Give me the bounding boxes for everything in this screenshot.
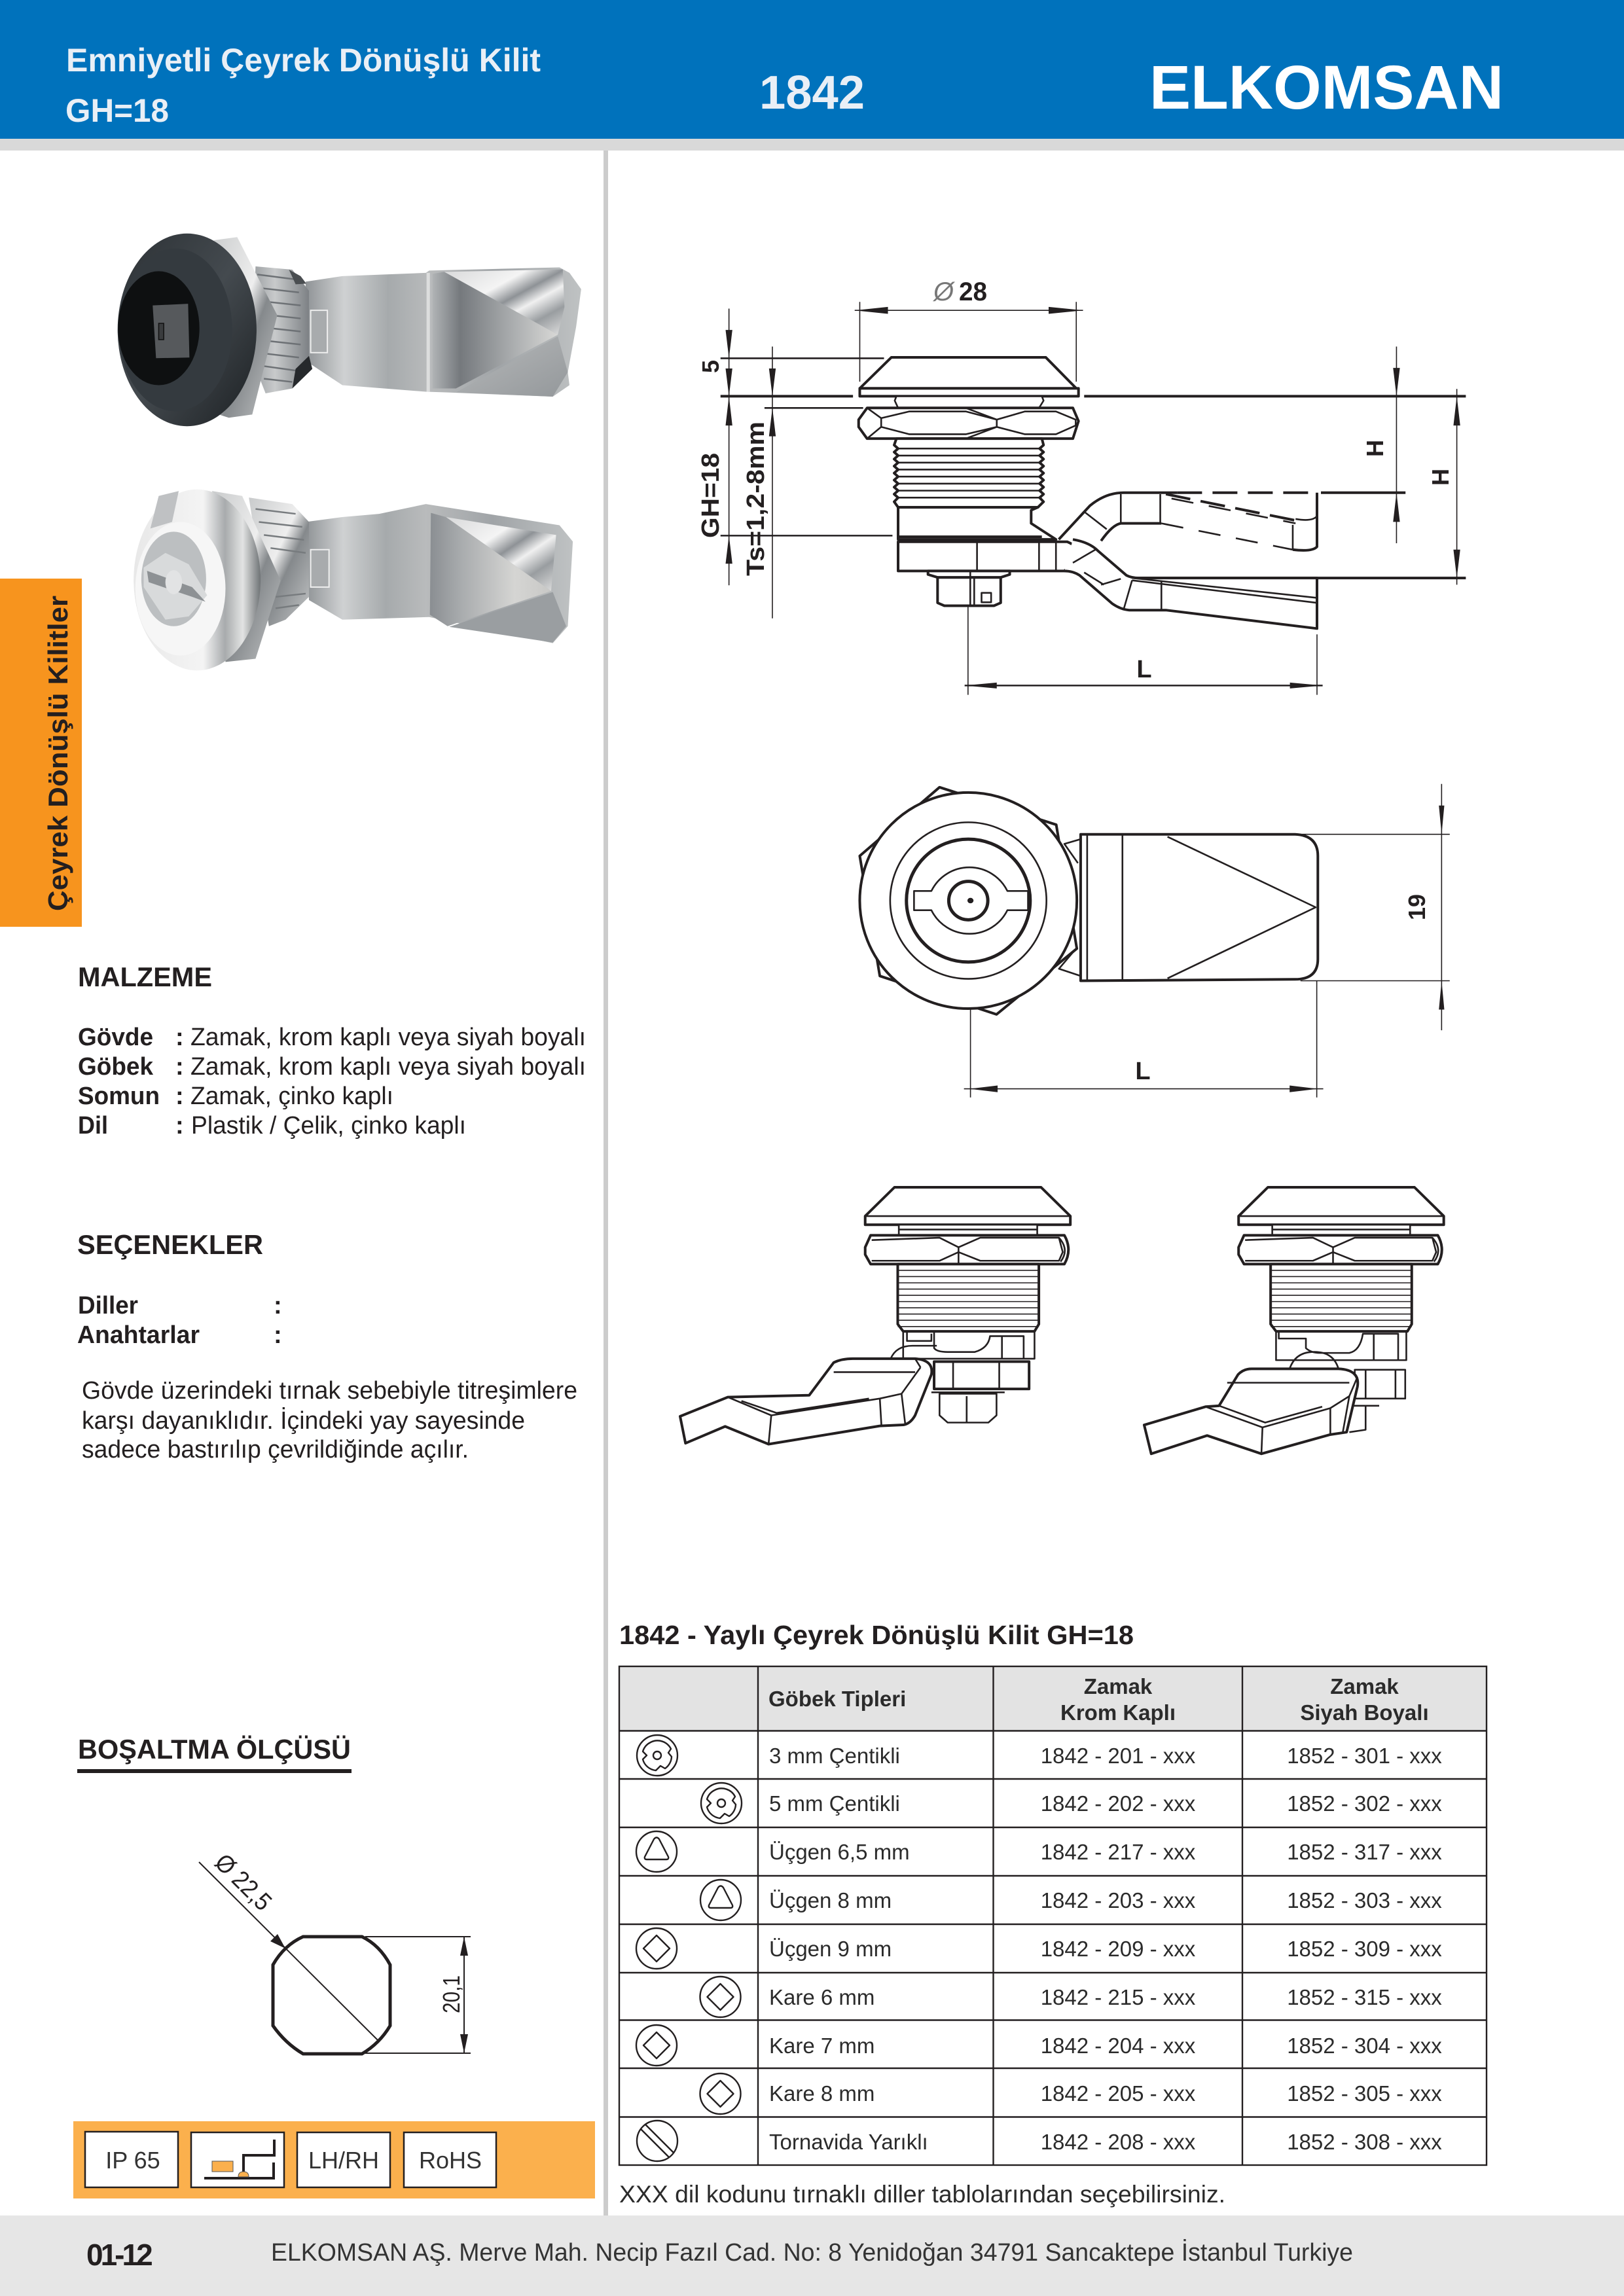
table header: Zamak [1330,1674,1399,1698]
table rows text: 1852 - 304 - xxx [1287,2034,1442,2058]
description text [82,1377,577,1463]
table grid [619,1666,1487,2165]
icon: diamond 8 mm [700,2073,741,2114]
side tab: category [0,579,82,927]
icon: diamond 6 mm [700,1977,741,2017]
table rows text [769,1744,1442,2154]
icon: diamond 7 mm [636,2025,677,2066]
table rows text: 3 mm Çentikli [769,1744,900,1768]
certification badge bar [73,2121,595,2198]
table rows text: 1852 - 305 - xxx [1287,2081,1442,2106]
table rows text: 1842 - 201 - xxx [1041,1744,1196,1768]
table rows text: 1852 - 301 - xxx [1287,1744,1442,1768]
cutout section [73,1734,595,2198]
product photo: chrome lock [134,490,573,670]
table rows text: Tornavida Yarıklı [769,2130,928,2154]
description text: karşı dayanıklıdır. İçindeki yay sayesinde [82,1407,525,1435]
heading: cutout dimension: BOŞALTMA ÖLÇÜSÜ [78,1734,351,1765]
header band [0,0,1624,151]
tongue [1081,834,1318,981]
cap circles [859,793,1077,1009]
label: 5: 5 [697,360,724,373]
material list: Dil [78,1112,108,1139]
product title: Emniyetli Çeyrek Dönüşlü Kilit [66,42,541,79]
cutout diagram: 20,1 [438,1975,465,2013]
table rows text: Kare 7 mm [769,2034,875,2058]
options list: : [274,1321,282,1349]
table rows text: Kare 6 mm [769,1985,875,2009]
label: L: L [1135,1058,1151,1085]
label: L: L [1136,656,1152,683]
material list: : [175,1024,184,1051]
label: Ts range: Ts=1,2-8mm [742,422,770,576]
material list: Zamak, krom kaplı veya siyah boyalı [190,1053,586,1081]
options list: : [274,1292,282,1319]
material list: Zamak, çinko kaplı [190,1083,393,1110]
side tab: category: Çeyrek Dönüşlü Kilitler [43,596,73,911]
table rows text: Üçgen 6,5 mm [769,1840,910,1864]
table rows text: 1852 - 302 - xxx [1287,1791,1442,1816]
table header: Zamak [1084,1674,1153,1698]
label: GH=18: GH=18 [697,453,725,538]
vertical divider [604,151,608,2215]
table rows text: 1852 - 315 - xxx [1287,1985,1442,2009]
options list: Anahtarlar [77,1321,200,1349]
table rows text: 1842 - 203 - xxx [1041,1888,1196,1912]
table rows text: 1842 - 209 - xxx [1041,1937,1196,1961]
brand name: ELKOMSAN [1149,53,1504,122]
page number: 01-12 [86,2238,152,2272]
table rows text: 1842 - 208 - xxx [1041,2130,1196,2154]
drawing labels [697,278,1454,1085]
material list: Göbek [78,1053,154,1081]
table header [619,1666,1487,1731]
hex nut and tabs [859,787,1077,1014]
product table [619,1620,1487,2208]
heading: material: MALZEME [78,961,212,992]
table rows text: 1852 - 303 - xxx [1287,1888,1442,1912]
dimensions [964,784,1450,1098]
badge: IP 65 [85,2132,178,2187]
product code: 1842 [759,67,865,119]
table rows text: 1852 - 309 - xxx [1287,1937,1442,1961]
dimension lines [721,302,1466,695]
label: diameter 28 [932,278,987,306]
heading: options: SEÇENEKLER [77,1229,263,1260]
product subtitle: GH=18 [65,92,169,129]
material list: Zamak, krom kaplı veya siyah boyalı [190,1024,586,1051]
table rows text: 1852 - 317 - xxx [1287,1840,1442,1864]
table rows text: Kare 8 mm [769,2081,875,2106]
technical drawing: perspective view right [1144,1187,1444,1454]
cutout diagram: Ø 22,5 [209,1849,277,1916]
options list [77,1292,282,1349]
technical drawing: front view [859,784,1450,1098]
material list: Somun [78,1083,160,1110]
footer [0,2215,1624,2296]
options list: Diller [78,1292,138,1319]
label: H: H [1427,469,1454,486]
lock body [859,357,1076,388]
material list: : [175,1053,184,1081]
badge: RoHS: RoHS [419,2147,482,2174]
table note: XXX dil kodunu tırnaklı diller tablolarından seçebilirsiniz. [619,2181,1225,2208]
icon: triangle 8 mm [700,1880,741,1920]
label: 19: 19 [1403,894,1430,920]
table rows text: 1842 - 202 - xxx [1041,1791,1196,1816]
material list: : [175,1112,184,1139]
table title: 1842 - Yaylı Çeyrek Dönüşlü Kilit GH=18 [619,1620,1134,1650]
badge: LH/RH: LH/RH [308,2147,379,2174]
table rows text: 1852 - 308 - xxx [1287,2130,1442,2154]
badge: IP 65: IP 65 [105,2147,160,2174]
description text: sadece bastırılıp çevrildiğinde açılır. [82,1436,469,1463]
table rows text: Üçgen 9 mm [769,1937,892,1961]
material list [78,1024,586,1139]
cam tongue: lower position [1064,539,1317,628]
badge: mounting icon [191,2132,284,2187]
table rows text: 1842 - 204 - xxx [1041,2034,1196,2058]
bottom nut [928,571,1010,577]
table rows text: 5 mm Çentikli [769,1791,900,1816]
description text: Gövde üzerindeki tırnak sebebiyle titreşimlere [82,1377,577,1405]
badge: RoHS [404,2132,496,2187]
table header: Krom Kaplı [1060,1700,1176,1725]
options section [77,1229,577,1463]
table rows text: Üçgen 8 mm [769,1888,892,1912]
table rows text: 1842 - 215 - xxx [1041,1985,1196,2009]
technical drawing: perspective view left [680,1187,1070,1444]
material list: : [175,1083,184,1110]
table rows text: 1842 - 217 - xxx [1041,1840,1196,1864]
icon: diamond 9 mm [636,1928,677,1969]
product photo: black lock [118,234,581,426]
material list: Plastik / Çelik, çinko kaplı [191,1112,466,1139]
company address: ELKOMSAN AŞ. Merve Mah. Necip Fazıl Cad. No: 8 Yenidoğan 34791 Sancaktepe İstanbul Turkiye [271,2238,1353,2267]
icon: 3 mm notched hub [637,1735,677,1776]
table rows text: 1842 - 205 - xxx [1041,2081,1196,2106]
material section [78,961,586,1139]
material list: Gövde [78,1024,153,1051]
icon: 5 mm notched hub [701,1783,742,1823]
label: H: H [1362,440,1388,457]
icon: screwdriver slot [637,2121,677,2161]
label: diameter 28: 28 [959,278,987,306]
label: diameter 28: Ø [932,278,956,306]
cutout diagram [199,1849,471,2054]
table header: Göbek Tipleri [768,1687,906,1711]
technical drawing: side view with dimensions [721,302,1466,695]
table header: Siyah Boyalı [1300,1700,1429,1725]
icon: triangle 6.5 mm [636,1831,677,1872]
cam tongue: upper position [1059,493,1317,550]
badge: LH/RH [297,2132,390,2187]
